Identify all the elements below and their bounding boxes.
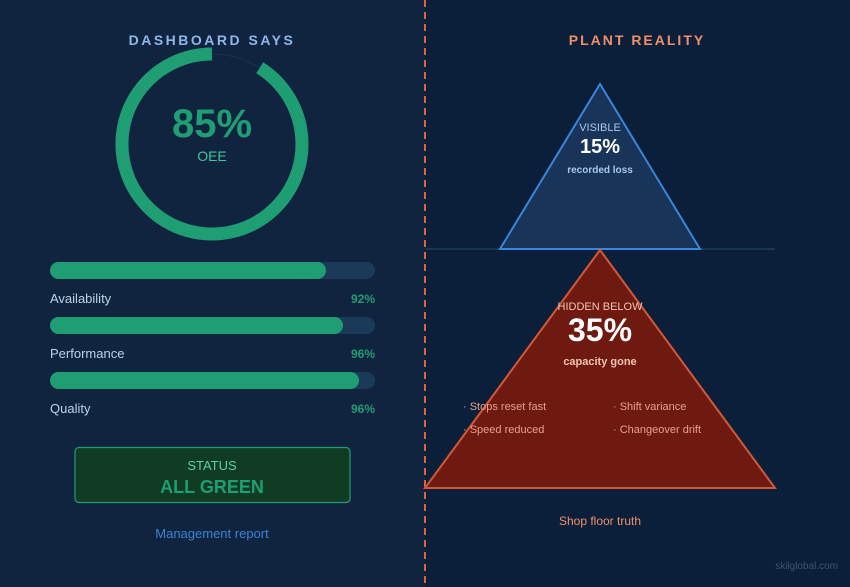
bar chart: availability: 92% (351, 292, 375, 306)
triangle: hidden below: capacity gone (563, 356, 637, 368)
caption: management report: Management report (155, 526, 269, 541)
triangle: visible tip: 15% (580, 136, 620, 158)
chart: OEE ring: 85% (172, 102, 252, 146)
triangle: hidden below: · Speed reduced (463, 424, 544, 436)
triangle: visible tip (500, 84, 700, 249)
caption: shop floor truth: Shop floor truth (559, 514, 641, 528)
bar chart: availability: Availability (50, 291, 112, 306)
panel: dashboard says (50, 32, 375, 541)
bar chart: performance (50, 317, 375, 361)
status box: ALL GREEN (160, 477, 264, 497)
chart: OEE ring (122, 54, 302, 234)
triangle: visible tip: VISIBLE (579, 122, 621, 134)
bar chart: availability (50, 262, 375, 306)
status box (75, 448, 350, 502)
triangle: hidden below: · Changeover drift (613, 424, 701, 436)
bar chart: quality: 96% (351, 402, 375, 416)
chart: OEE ring: OEE (197, 148, 227, 164)
heading: dashboard says: DASHBOARD SAYS (129, 32, 295, 48)
triangle: hidden below (425, 250, 775, 488)
watermark: skilglobal.com (775, 561, 838, 572)
triangle: hidden below: · Stops reset fast (463, 401, 546, 413)
status box: STATUS (187, 458, 237, 473)
triangle: hidden below: · Shift variance (613, 401, 686, 413)
bar chart: quality: Quality (50, 401, 91, 416)
triangle: visible tip: recorded loss (567, 165, 633, 176)
triangle: hidden below: HIDDEN BELOW (558, 301, 643, 313)
panel: plant reality (425, 32, 775, 528)
triangle: hidden below: 35% (568, 312, 632, 348)
bar chart: performance: Performance (50, 346, 124, 361)
bar chart: quality (50, 372, 375, 416)
bar chart: performance: 96% (351, 347, 375, 361)
heading: plant reality: PLANT REALITY (569, 32, 705, 48)
